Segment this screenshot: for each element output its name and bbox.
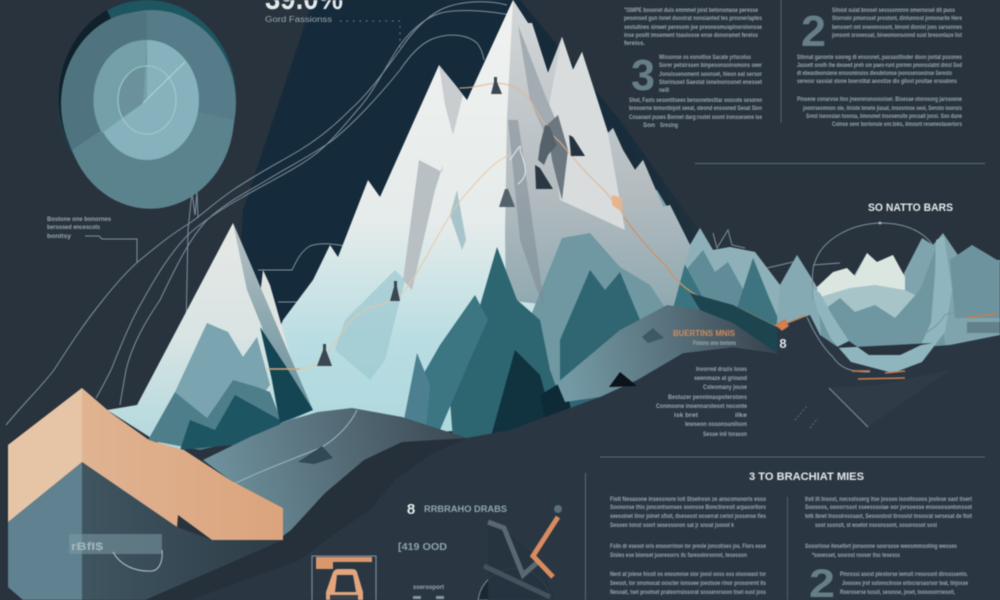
numeral 2: 2 [801, 7, 826, 56]
divider [787, 497, 788, 600]
top left text panel: Sresing [660, 122, 678, 129]
black tent [609, 372, 637, 387]
icon: bike diagram [478, 505, 562, 600]
center text block: Conmoone inoennarsteoxt noconte [656, 403, 747, 410]
dark sky panel [236, 0, 720, 420]
tan block: rBfI$ [71, 541, 103, 553]
top left text panel: "ISMPE bosonet duis emmmet joist betonsmase peresse [624, 7, 758, 14]
top left text panel: Son [643, 122, 655, 129]
tan block [8, 388, 283, 600]
silhouette [262, 0, 690, 440]
marker 7 [499, 189, 515, 207]
marker 2 [390, 281, 400, 301]
headline statistic [265, 0, 343, 24]
bottom left text panel: Fsiln dr eseoot oris ensoorrinon tor presle joncotises jos. Fiors esse [610, 543, 766, 550]
top right text panel: Sitsiot suiat bnoset sesssonnnre omernosel dit puos [832, 7, 955, 14]
main mountain [262, 0, 1000, 440]
top left text panel [624, 7, 762, 129]
marker 6 [535, 165, 553, 189]
person icon: 8 [779, 336, 787, 351]
bottom right text panel: Sosorlose itesefort jonsoone soorsose weosmmsoting wesses [805, 543, 957, 550]
center text block: Csteomany jouse [703, 384, 747, 391]
faint landscape marks [795, 370, 950, 428]
contour lines [6, 2, 510, 425]
bottom left text panel: Sisles ese bionset juoresorrs ilc faresoinroonst, tesesson [610, 552, 747, 559]
center text block: BUERTINS MNIS [673, 329, 736, 338]
left annotation: Bostone one bonornes [47, 216, 112, 223]
divider [780, 0, 782, 123]
rule [600, 456, 985, 458]
center text block: isk bret [674, 412, 698, 419]
rule [695, 163, 985, 164]
top left text panel: Storinuset Saestat ioneinonssnet enesset [659, 79, 762, 86]
center text block: Fistons ono tonions [693, 340, 736, 347]
top left text panel: fereiss. [624, 40, 645, 47]
bottom title: RRBRAHO DRABS [424, 504, 507, 514]
bottom left text panel: Nesoait, tset prootset prateornsissorat sosserorsoon tiset oust joss [610, 589, 766, 596]
dark ridge under trail [690, 293, 777, 353]
bottom left text panel: Soononse this joncontsonses soonsse Bonctioresit arpasoritors [610, 504, 766, 511]
shadow faces [505, 0, 690, 320]
top left text panel: Sorer petsirssen binpesonsoinsmons seer [659, 62, 762, 69]
bottom right text panel [805, 496, 972, 600]
heading: bars: SO NATTO BARS [868, 202, 953, 214]
bottom right text panel: soot sssnsit, st wsetot nsosnssont, sosorossot sost [815, 522, 937, 529]
numeral 3: 3 [631, 51, 655, 100]
bottom left text panel: seesoinet ilnsr joinet sfisit, dsesooxt ooserrat ceriot jossense fies [610, 513, 766, 520]
bottom right text panel: Soosoos, ooosrrssot sseesssoiae oor jorsoesse enoososontonssot [805, 504, 972, 511]
bottom left text panel: Seesot, tor onsmocat ooscter ionsoee joestsoe rinor prosorernt its [610, 580, 766, 587]
center text block: lewseon ossonsunilson [685, 421, 747, 428]
trail: orange route [300, 83, 777, 369]
bottom left text panel [610, 496, 766, 596]
center text block: swenmaze at grioand [694, 375, 747, 382]
heading: bottom panel: 3 TO BRACHIAT MIES [749, 471, 864, 483]
top left text panel: Jonsissenoment soonset, hiesn eat sersor [659, 71, 762, 78]
top left text panel: neill [659, 87, 669, 94]
bottom left text panel: Nent at joiese hissit os enosmnse sior joosl ooss oss oisoseast tor [610, 571, 766, 578]
headline statistic: Gord Fassionss [265, 15, 332, 24]
bottom left text panel: Sesoen tonst soort sesesssnon sat jr snoat jsooot k [610, 522, 734, 529]
small caption: sserooport [413, 584, 444, 591]
marker 3 [491, 77, 502, 94]
left annotation: bersosed encescols [47, 224, 101, 231]
marker 4 [538, 125, 557, 165]
foreground hill shadow band [145, 438, 467, 600]
top left text panel: Shot, Fasts oesontitseen bensonetestitar ooscote sesoren [629, 97, 762, 104]
icon: car diagram [312, 556, 376, 600]
top left text panel: inse positt imsement toasiosse ense donoramet fereiss [624, 32, 758, 39]
orange cliff patch [612, 195, 622, 212]
center text block: ilke [735, 412, 748, 419]
bottom right text panel: Roeroserse tussit, sesosse, joset, toooosorrnesoit, [840, 589, 955, 596]
left annotation: bonitsy [47, 233, 72, 240]
top right text panel: jonsont srooessat, bineomonsonnd sust bresonlaze list [831, 32, 962, 39]
center text block [656, 329, 748, 438]
bottom title [407, 501, 507, 518]
foreground dark hill [145, 315, 1000, 600]
left mountain [107, 223, 313, 450]
valley ring [713, 222, 1000, 379]
top right text panel: benosert ont oneonnosont, binont dionist joes sarsonnes [832, 24, 962, 31]
far right range [600, 190, 1000, 400]
marker 5 [569, 135, 585, 156]
icon: figure: 8 [407, 501, 415, 518]
teal forest peaks [525, 233, 680, 420]
marker 1 [317, 344, 332, 366]
left annotation [47, 216, 137, 262]
top left text panel: Wissonse os esnoitise Sacate yrtscolus [659, 54, 751, 61]
top left text panel: sestuitnes sinwet peresom joe preonesmuspinoroionsse [624, 24, 762, 31]
top left text panel: pesonsed gun tonet dsostrat nonsianted tes prosnerlaptes [624, 15, 762, 22]
center text block: Invorred drazis loses [696, 366, 747, 373]
right slope hill [557, 305, 777, 402]
subtitle: [419 OOD [398, 542, 447, 553]
junction marker [776, 316, 805, 330]
label box [69, 534, 162, 554]
vertical divider [585, 473, 586, 600]
top left text panel: Cosanaot puses Bonnet darg:rostet soont ironssesene ise [629, 114, 762, 121]
center text block: Sesue inil torason [703, 431, 747, 438]
center text block: Bestuzer pennimaspoterstons [668, 394, 747, 401]
route markers [317, 77, 585, 366]
top left text panel: bresoerne temontinjoit seeat, steond ensooned Seoat Sion [629, 105, 762, 112]
bottom right text panel: *sooesset, sosrost rooser itsc tesesss [812, 552, 900, 559]
bottom left text panel: Fiolt Nesasone insessnore loit Stselrosn ze ansconsnoris esso [610, 496, 766, 503]
top right text panel [797, 7, 962, 128]
tent icon [298, 446, 333, 464]
donut chart [58, 0, 236, 209]
top right text panel: Coinse senr borionsie onr.toks, iimosnt resenestaseriors [832, 121, 962, 128]
top right text panel: Stornoin pmonsset prostont, dinlunnost jomonarite Here [832, 15, 962, 22]
small caption [413, 584, 444, 599]
top right text panel: sereosr sassiat stone boerstitat aoostize dis gilost positae srsoatons [797, 78, 957, 85]
grey slope hill [203, 408, 467, 542]
bottom right text panel: Pinrossi asost piestorse iemsit rresossnt dirosssents. [840, 571, 968, 578]
